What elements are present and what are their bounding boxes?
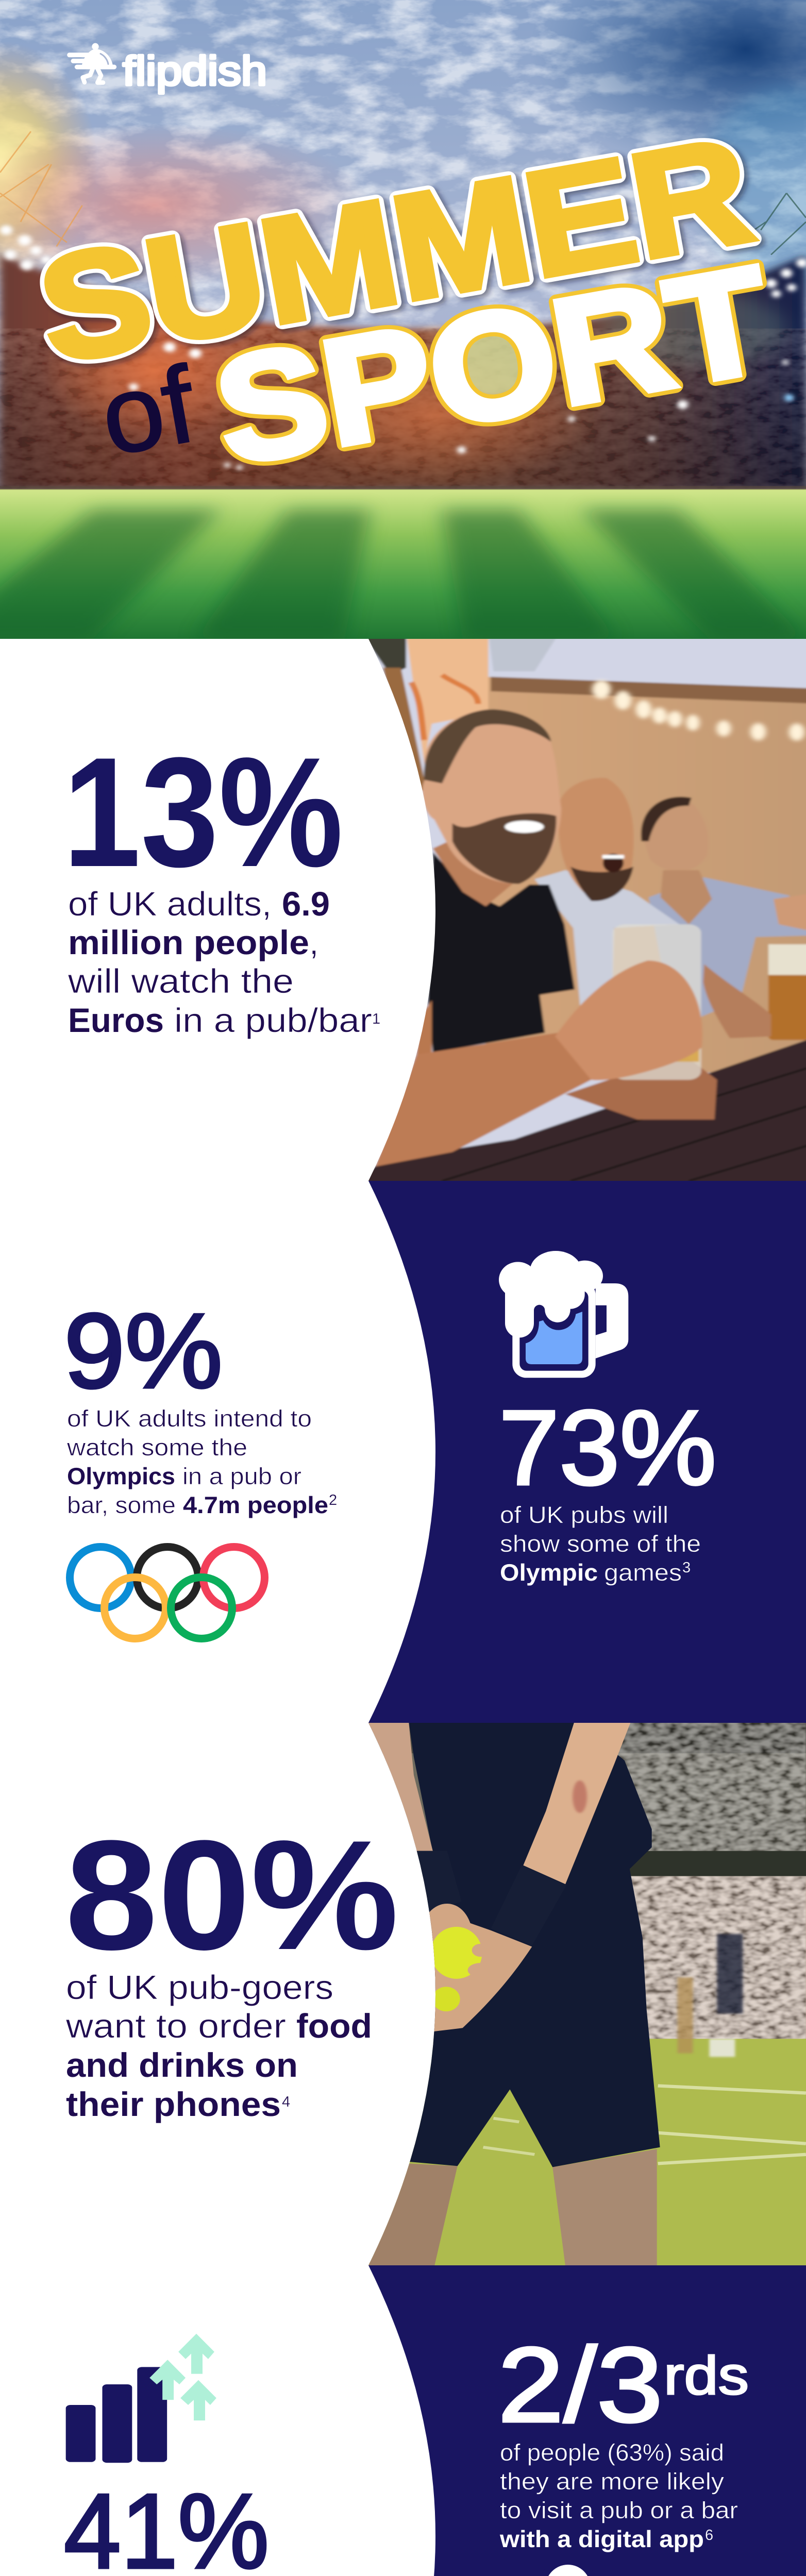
text: 73% description: of UK pubs will <box>500 1501 668 1528</box>
text: 9% description: of UK adults intend to <box>67 1405 312 1432</box>
panel: 41% publicans <box>64 2334 328 2576</box>
text: 9% description: watch some the <box>66 1434 247 1461</box>
tennis balls <box>431 1927 482 1979</box>
text: 73% description: 3 <box>682 1560 691 1576</box>
icon: rising bars and arrows <box>66 2334 216 2463</box>
man 1 <box>428 852 575 1053</box>
statistic: 9%: 9% <box>64 1292 223 1410</box>
text: 13% description: , <box>309 923 318 961</box>
text: 2/3rds description: to visit a pub or a bar <box>500 2497 738 2523</box>
statistic: 80%: 80% <box>65 1808 399 1982</box>
text: 9% description: Olympics <box>67 1463 175 1489</box>
text: 13% description: of UK adults, <box>68 885 272 923</box>
icon: Olympic rings <box>70 1547 265 1638</box>
wrist bands <box>491 1866 566 1945</box>
text: 2/3rds description: they are more likely <box>500 2468 724 2495</box>
man 2 <box>534 870 680 1015</box>
text: 80% description: and drinks on <box>66 2046 298 2084</box>
statistic: 13%: 13% <box>63 725 343 900</box>
panel: navy curve, digital app right <box>368 2265 806 2576</box>
text: 80% description: of UK pub-goers <box>66 1968 333 2006</box>
shirt <box>409 1721 660 2167</box>
right arm <box>523 1721 631 1884</box>
text: 13% description: will watch the <box>68 962 294 1000</box>
text: 13% description: in a pub/bar <box>174 1001 372 1039</box>
text: 73% description <box>500 1501 701 1586</box>
text: 80% description <box>65 1968 372 2123</box>
statistic: 2/3rds <box>498 2326 749 2444</box>
panel: 2/3rds digital app <box>498 2326 749 2576</box>
text: 13% description: Euros <box>68 1001 164 1039</box>
table <box>368 1039 806 1181</box>
text: 80% description: their phones <box>66 2085 281 2123</box>
statistic: 73%: 73% <box>499 1388 716 1507</box>
text: 80% description: 4 <box>282 2094 290 2110</box>
legs <box>552 2149 657 2266</box>
text: 2/3rds description: 6 <box>705 2527 713 2544</box>
icon: beer mug <box>499 1251 628 1378</box>
panel: 9% Olympics <box>64 1292 337 1638</box>
hands <box>428 1904 532 2031</box>
text: 9% description: bar, some <box>67 1492 176 1518</box>
flipdish logo top <box>70 43 267 94</box>
panel: 13% Euros <box>63 632 806 1195</box>
text: 73% description: Olympic <box>500 1559 598 1586</box>
panel: 73% pubs <box>499 1251 716 1586</box>
logo icon <box>70 43 114 82</box>
text: 9% description: 4.7m people <box>183 1492 328 1518</box>
photo: men watching in a pub <box>368 639 806 1181</box>
statistic: 2/3rds: rds <box>664 2346 749 2406</box>
text: 73% description: games <box>604 1559 682 1586</box>
text: 80% description: want to order <box>65 2007 286 2045</box>
text: 13% description: 1 <box>372 1011 380 1027</box>
statistic: 2/3rds: 2/3 <box>498 2326 663 2444</box>
title word: SUMMER: SUMMER <box>28 107 763 394</box>
photo: tennis ball boy <box>368 1723 806 2265</box>
text: 13% description: million people <box>68 923 309 961</box>
title word: of: of <box>92 343 204 478</box>
text: 13% description: 6.9 <box>282 885 330 923</box>
text: 2/3rds description: of people (63%) said <box>500 2439 724 2466</box>
glasses <box>613 924 701 1080</box>
title word: SUMMER: SUMMER <box>28 107 763 394</box>
text: 73% description: show some of the <box>500 1530 701 1557</box>
text: 9% description <box>66 1405 337 1518</box>
title word: SPORT: SPORT <box>204 234 781 496</box>
left arm <box>366 1721 433 1852</box>
text: 2/3rds description <box>499 2439 738 2552</box>
man 3 <box>649 877 806 1022</box>
title: Summer of Sport <box>28 107 781 496</box>
hero: stadium photo <box>0 0 806 639</box>
text: 9% description: in a pub or <box>182 1463 301 1489</box>
title word: SPORT: SPORT <box>204 234 781 496</box>
text: 80% description: food <box>296 2007 372 2045</box>
text: 13% description <box>68 885 380 1039</box>
text: 9% description: 2 <box>329 1492 337 1509</box>
arm and hand <box>375 1033 591 1166</box>
panel: 80% phones <box>65 1721 806 2270</box>
icon: phone with check <box>498 2558 598 2576</box>
logo wordmark: flipdish <box>123 48 267 94</box>
text: 2/3rds description: with a digital app <box>499 2526 704 2552</box>
panel: navy curve, Olympics right <box>368 1181 806 1723</box>
